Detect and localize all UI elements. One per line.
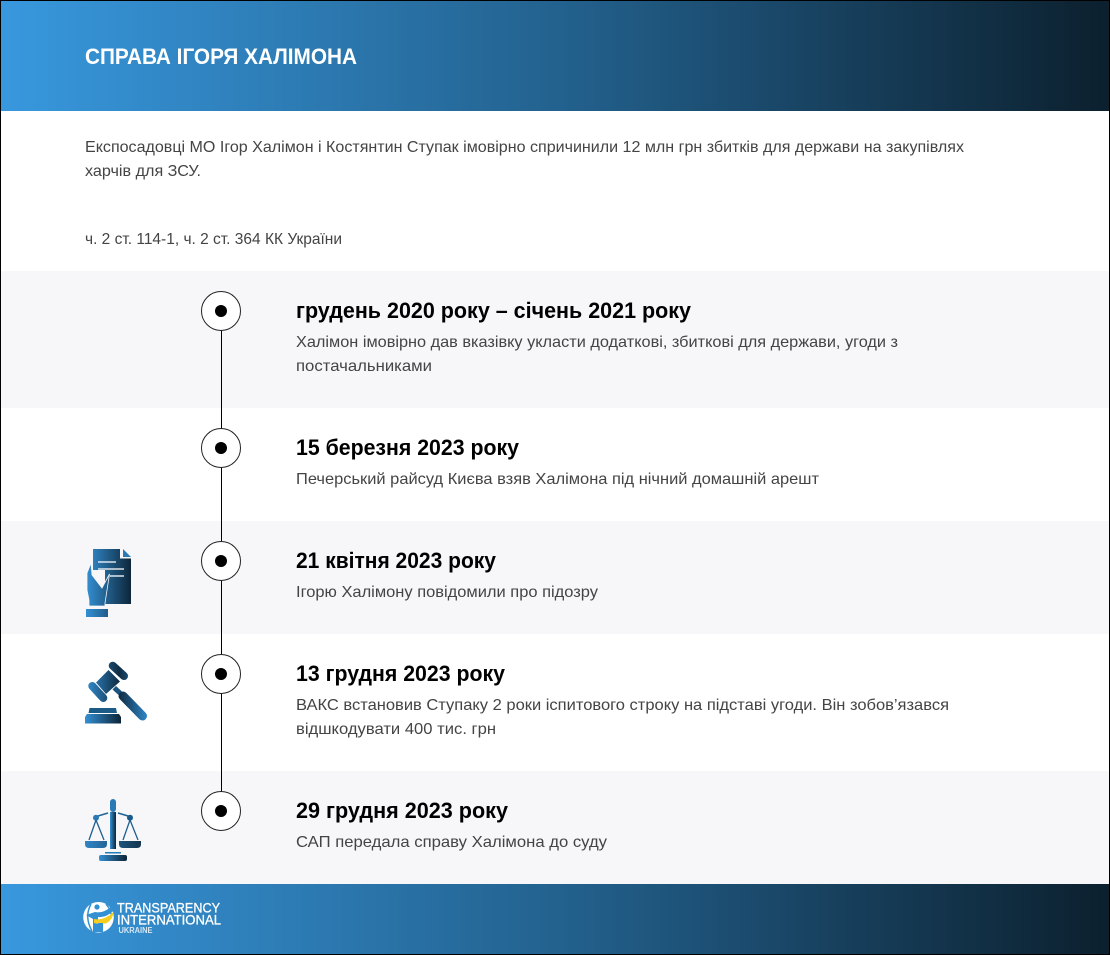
logo: Transparency International Ukraine: UKRAINE — [118, 926, 153, 935]
event 1: постачальниками — [296, 358, 432, 375]
event 4: відшкодувати 400 тис. грн — [296, 721, 496, 738]
footer band — [1, 884, 1109, 954]
header band — [1, 1, 1109, 111]
title: СПРАВА ІГОРЯ ХАЛІМОНА — [85, 44, 357, 69]
icon: scales — [85, 799, 141, 861]
marker 5 — [202, 792, 240, 830]
row backgrounds — [1, 271, 1109, 884]
marker 3 — [202, 542, 240, 580]
marker 4 — [202, 654, 240, 694]
event 2: Печерський райсуд Києва взяв Халімона під нічний домашній арешт — [296, 471, 820, 488]
icon: hand holding document — [86, 549, 131, 617]
intro text: харчів для ЗСУ. — [85, 163, 201, 180]
logo: Transparency International Ukraine: TRANSPARENCY — [117, 900, 221, 916]
event 1: Халімон імовірно дав вказівку укласти додаткові, збиткові для держави, угоди з — [296, 334, 898, 351]
marker 2 — [202, 428, 240, 468]
event 1: грудень 2020 року – січень 2021 року — [296, 298, 692, 323]
event 5: 29 грудня 2023 року — [296, 798, 509, 823]
timeline — [202, 292, 240, 830]
event 4: 13 грудня 2023 року — [296, 661, 506, 686]
event 4: ВАКС встановив Ступаку 2 роки іспитового строку на підставі угоди. Він зобов’язався — [296, 697, 949, 714]
event 2 — [296, 435, 820, 488]
icon: gavel — [85, 666, 142, 724]
marker 1 — [202, 292, 240, 330]
logo: Transparency International Ukraine — [83, 900, 221, 935]
event 4 — [296, 661, 949, 738]
event 5: САП передала справу Халімона до суду — [296, 834, 607, 851]
event 2: 15 березня 2023 року — [296, 435, 520, 460]
event 3: Ігорю Халімону повідомили про підозру — [296, 584, 598, 601]
legal articles: ч. 2 ст. 114-1, ч. 2 ст. 364 КК України — [85, 231, 342, 248]
logo: Transparency International Ukraine: INTERNATIONAL — [117, 912, 221, 928]
event 5 — [296, 798, 607, 851]
event 1 — [296, 298, 898, 375]
intro text — [85, 139, 964, 180]
intro text: Експосадовці МО Ігор Халімон і Костянтин Ступак імовірно спричинили 12 млн грн збитків для держави на закупівлях — [85, 139, 964, 156]
event 3: 21 квітня 2023 року — [296, 548, 497, 573]
event 3 — [296, 548, 598, 601]
